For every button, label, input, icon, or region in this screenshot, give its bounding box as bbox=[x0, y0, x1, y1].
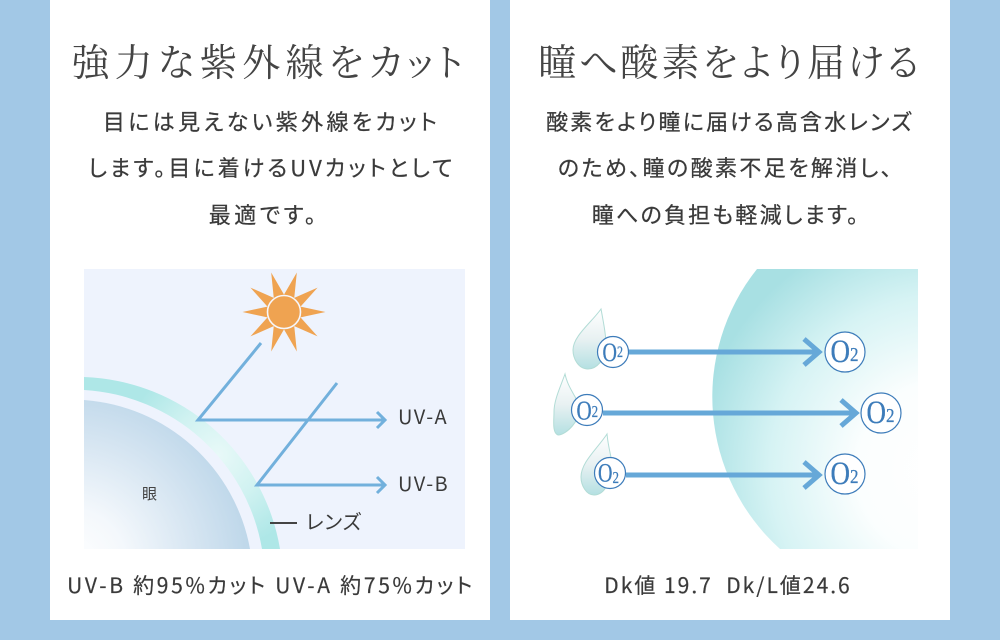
arrow: UV-B bbox=[257, 383, 385, 493]
text block: UV description: 最適です。 bbox=[209, 198, 319, 230]
label: lens: レンズ bbox=[306, 506, 362, 535]
O2 target: middle bbox=[861, 393, 901, 433]
icon: sun bbox=[242, 271, 326, 353]
O2 target: top: O bbox=[830, 334, 850, 370]
text block: oxygen description: のため、瞳の酸素不足を解消し、 bbox=[558, 151, 894, 183]
O2 target: middle: O bbox=[866, 395, 886, 431]
O2 target: top bbox=[825, 332, 865, 372]
droplet: middle: 2 bbox=[592, 403, 598, 421]
label: UV-B: UV-B bbox=[398, 468, 449, 497]
text block: oxygen description bbox=[546, 105, 914, 230]
text block: oxygen description: 瞳への負担も軽減します。 bbox=[592, 198, 860, 230]
lens bbox=[84, 377, 280, 549]
label: lens bbox=[270, 506, 362, 535]
panel: oxygen bbox=[510, 0, 950, 620]
label: eye: 眼 bbox=[142, 483, 157, 504]
eye bbox=[84, 400, 250, 549]
arrow: oxygen middle bbox=[603, 400, 856, 426]
chart: lens surface bbox=[712, 269, 918, 549]
droplet: bottom: O bbox=[598, 459, 612, 488]
text block: oxygen description: 酸素をより瞳に届ける高含水レンズ bbox=[546, 105, 914, 137]
droplet: top: O bbox=[602, 339, 617, 368]
arrow: UV-A bbox=[198, 343, 385, 428]
arrow: oxygen top bbox=[629, 339, 819, 365]
text: UV cut rates: UV-B 約95%カット UV-A 約75%カット bbox=[67, 570, 475, 600]
droplet: top bbox=[573, 309, 628, 369]
text block: UV description: します。目に着けるUVカットとして bbox=[88, 151, 456, 183]
panel: UV cut bbox=[50, 0, 490, 620]
O2 target: top: 2 bbox=[850, 343, 858, 366]
chart background bbox=[84, 269, 465, 549]
O2 target: bottom: O bbox=[830, 456, 850, 492]
heading: UV cut: 強力な紫外線をカット bbox=[72, 32, 468, 87]
label: UV-A: UV-A bbox=[398, 401, 448, 430]
text block: UV description bbox=[88, 105, 456, 230]
droplet: bottom bbox=[581, 434, 626, 495]
text: oxygen values: Dk値 19.7 Dk/L値24.6 bbox=[604, 570, 852, 600]
arrow: oxygen bottom bbox=[626, 462, 819, 488]
O2 target: bottom: 2 bbox=[850, 465, 858, 488]
chart: UV diagram bbox=[84, 269, 918, 549]
text block: UV description: 目には見えない紫外線をカット bbox=[103, 105, 440, 137]
heading: oxygen: 瞳へ酸素をより届ける bbox=[538, 32, 922, 87]
droplet: middle bbox=[554, 374, 602, 435]
O2 target: middle: 2 bbox=[886, 404, 894, 427]
droplet: middle: O bbox=[576, 396, 592, 426]
droplet: top: 2 bbox=[617, 345, 623, 362]
droplet: bottom: 2 bbox=[612, 469, 619, 487]
O2 target: bottom bbox=[825, 454, 865, 494]
